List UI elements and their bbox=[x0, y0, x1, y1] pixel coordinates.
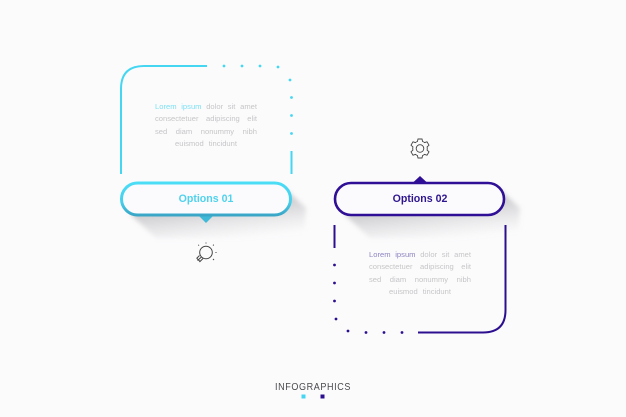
shadow: pill 2 bbox=[344, 190, 520, 238]
pointer: option 2 bbox=[413, 176, 427, 182]
text block: option 1: euismod tincidunt bbox=[175, 139, 237, 148]
text block: option 2: consectetuer adipiscing elit bbox=[369, 262, 471, 271]
heading: options 02: Options 02 bbox=[393, 193, 447, 205]
pill: option 1 bbox=[122, 183, 290, 215]
pointer: option 1 bbox=[199, 216, 213, 223]
title: INFOGRAPHICS bbox=[275, 380, 351, 392]
text block: option 2: euismod tincidunt bbox=[389, 287, 451, 296]
text block: option 1: Lorem ipsum dolor sit amet bbox=[155, 102, 257, 111]
icon: light bulb bbox=[196, 242, 216, 262]
text block: option 1 bbox=[155, 102, 257, 148]
text block: option 2: Lorem ipsum dolor sit amet bbox=[369, 250, 471, 259]
pill: option 2 bbox=[335, 183, 504, 215]
heading: options 01: Options 01 bbox=[179, 193, 233, 205]
text block: option 1: sed diam nonummy nibh bbox=[155, 127, 257, 136]
shadow: pill 1 bbox=[130, 190, 306, 238]
icon: gear bbox=[411, 139, 429, 158]
text block: option 1: consectetuer adipiscing elit bbox=[155, 114, 257, 123]
text block: option 2: sed diam nonummy nibh bbox=[369, 275, 471, 284]
title markers bbox=[302, 394, 324, 398]
panel frame: option 1 bbox=[121, 65, 293, 174]
panel frame: option 2 bbox=[333, 225, 506, 334]
text block: option 2 bbox=[369, 250, 471, 296]
